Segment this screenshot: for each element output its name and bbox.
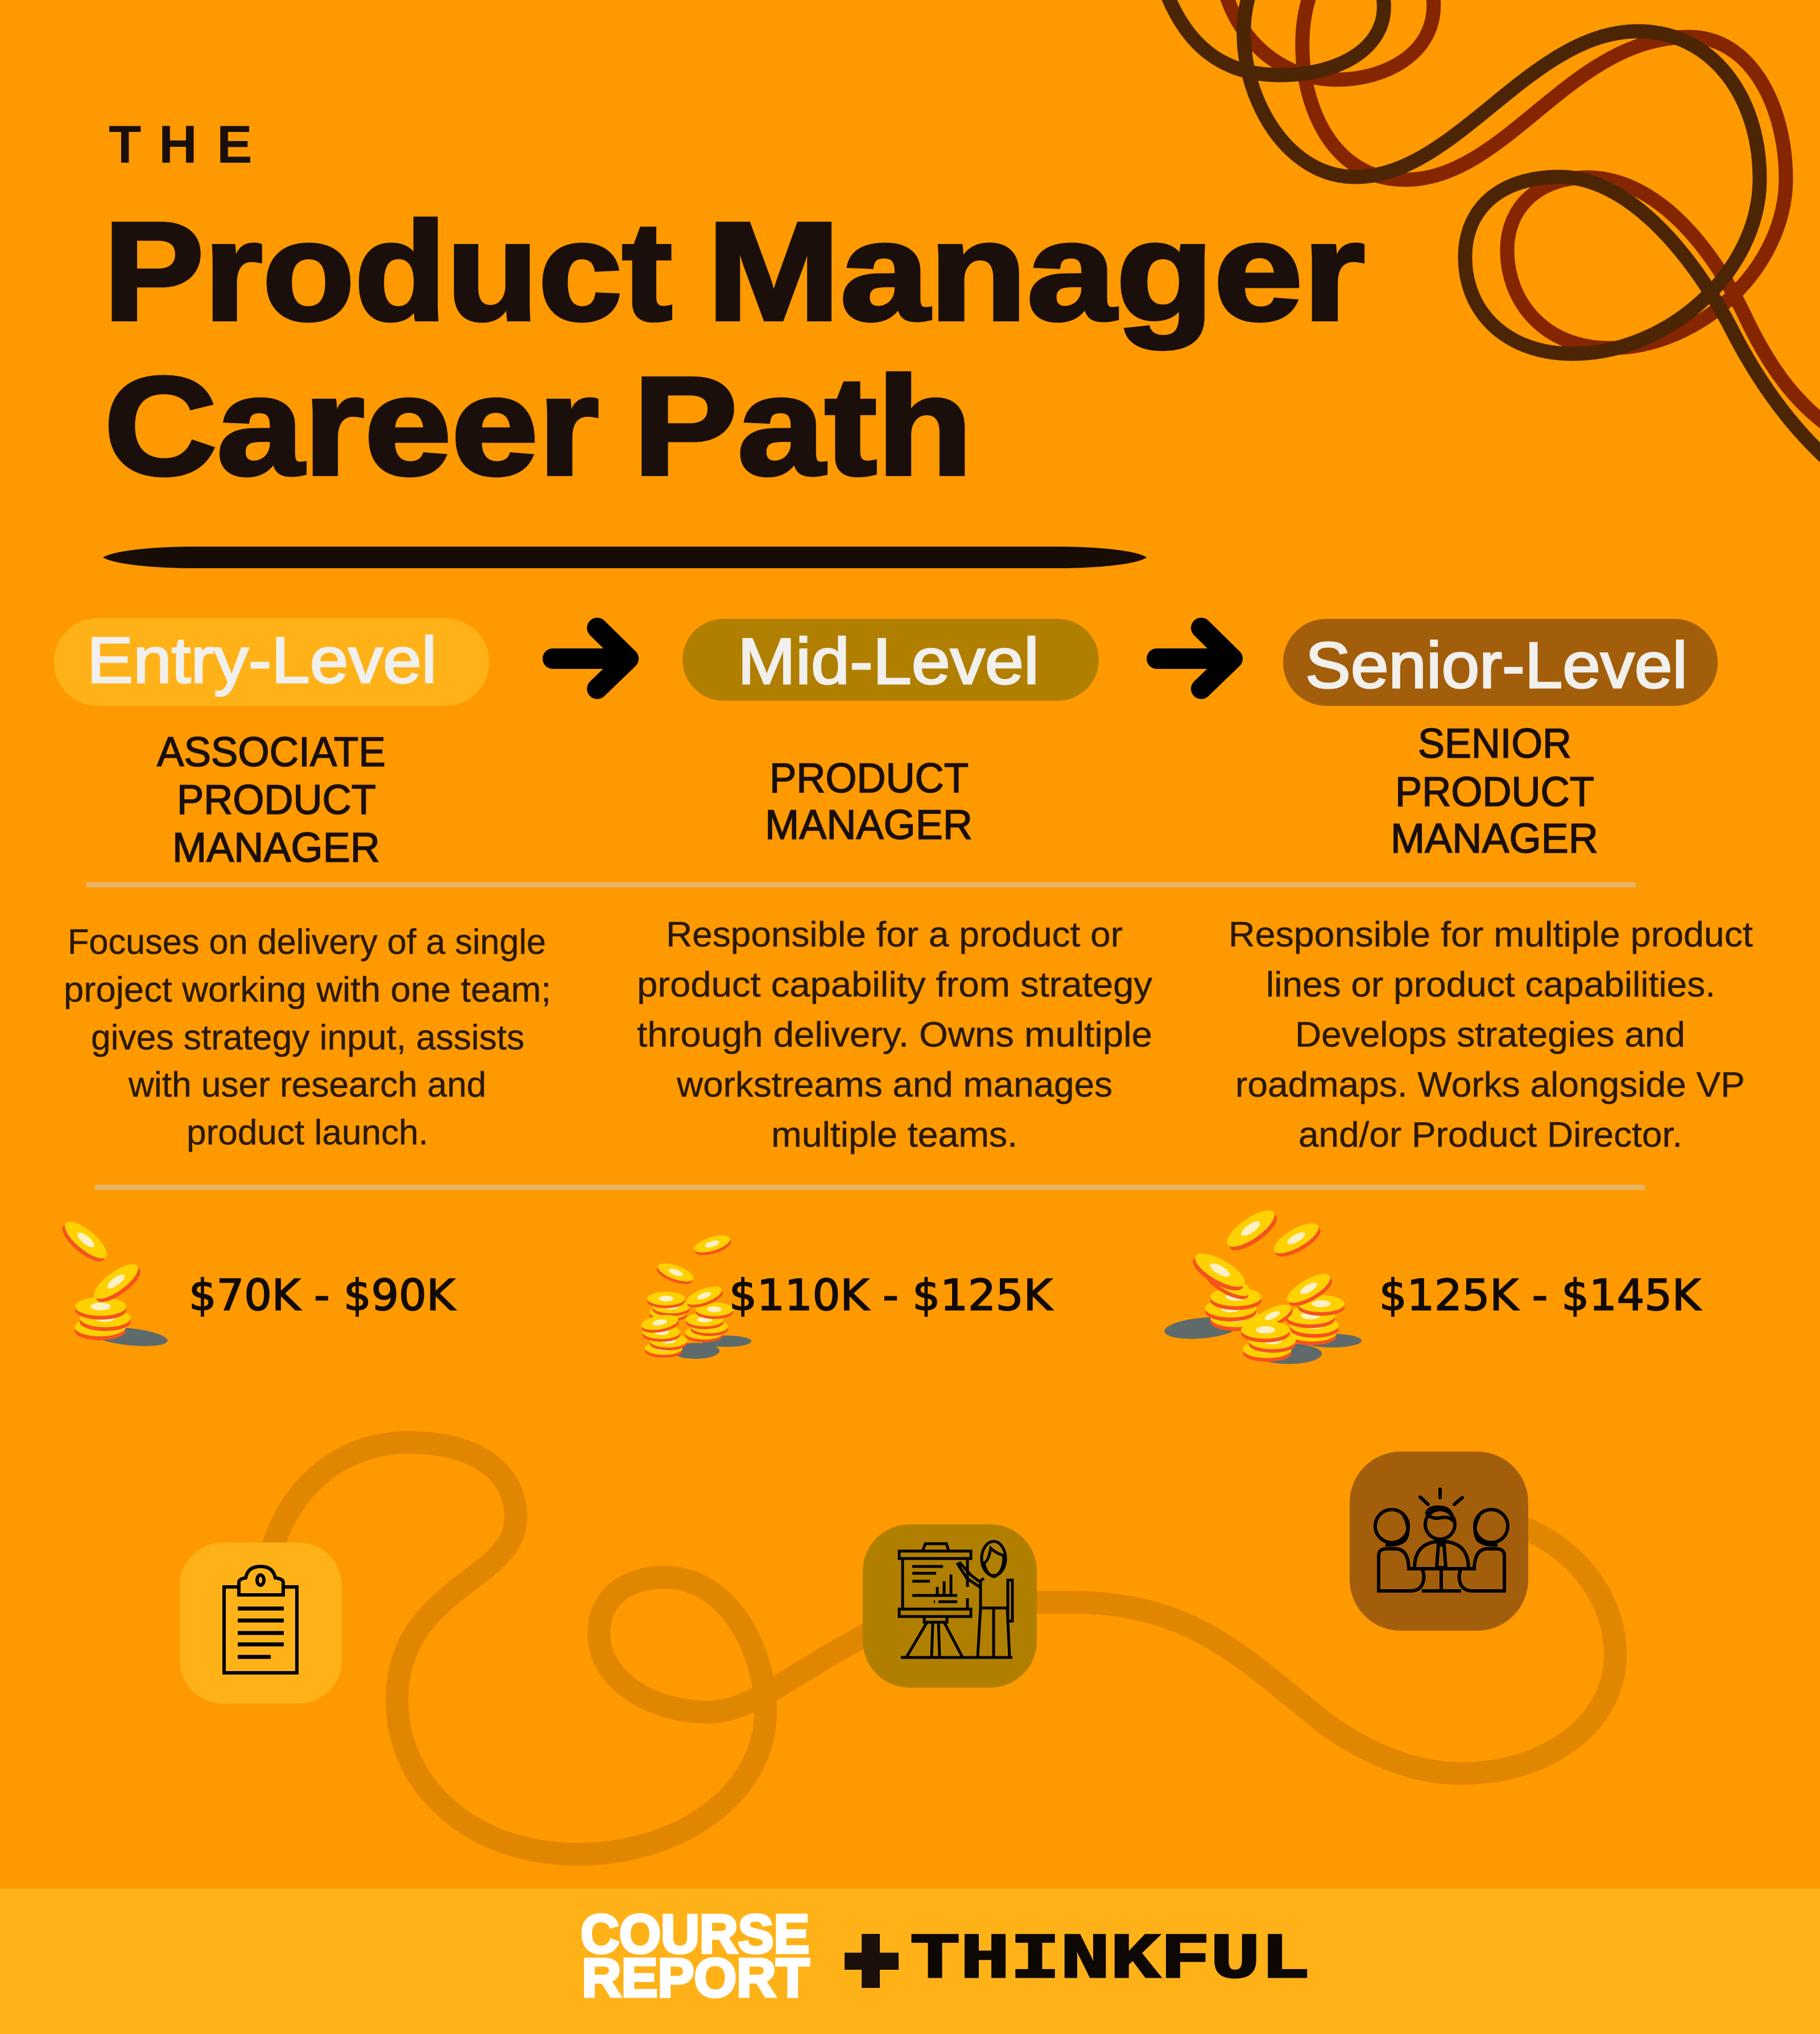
- role: senior product manager: SENIOR: [1418, 721, 1571, 767]
- icon: coins senior level: [1164, 1204, 1362, 1364]
- description: entry level: Focuses on delivery of a single: [68, 923, 546, 962]
- description: entry level: project working with one team;: [64, 970, 551, 1010]
- description: entry level: with user research and: [128, 1065, 486, 1105]
- badge: entry level: Entry-Level: [87, 625, 437, 697]
- role: product manager: [765, 755, 973, 848]
- role: senior product manager: PRODUCT: [1395, 769, 1594, 815]
- icon tile: clipboard: [180, 1543, 342, 1704]
- description: mid level: through delivery. Owns multiple: [637, 1015, 1152, 1055]
- role: associate product manager: ASSOCIATE: [157, 729, 386, 775]
- logo: course report: REPORT: [582, 1948, 809, 2008]
- salary: mid level: $110K - $125K: [729, 1270, 1053, 1320]
- plus sign: [845, 1934, 899, 1988]
- title: [104, 114, 1365, 505]
- description: senior level: [1228, 915, 1753, 1155]
- description: senior level: and/or Product Director.: [1298, 1115, 1682, 1155]
- role: associate product manager: MANAGER: [172, 825, 380, 871]
- title: THE: [109, 114, 253, 174]
- icon: coins mid level: [640, 1232, 751, 1359]
- badge: mid level: Mid-Level: [738, 626, 1039, 698]
- title: Product: [104, 193, 672, 350]
- description: entry level: product launch.: [187, 1113, 428, 1152]
- description: senior level: lines or product capabilities.: [1266, 965, 1715, 1004]
- decorative ropes top right: [1168, 0, 1820, 458]
- salary: entry level: $70K - $90K: [189, 1270, 456, 1320]
- description: mid level: [637, 915, 1152, 1155]
- salary: senior level: $125K - $145K: [1379, 1270, 1702, 1320]
- icon tile: presenter at easel: [863, 1524, 1037, 1688]
- logo: course report: COURSE: [581, 1904, 809, 1965]
- arrow: entry to mid: [553, 628, 628, 689]
- description: senior level: Develops strategies and: [1295, 1015, 1685, 1055]
- badge: senior level: Senior-Level: [1305, 630, 1687, 702]
- description: senior level: Responsible for multiple product: [1228, 915, 1753, 954]
- role: senior product manager: MANAGER: [1391, 816, 1598, 862]
- icon tile: team meeting: [1350, 1452, 1528, 1631]
- arrow: mid to senior: [1157, 628, 1232, 689]
- badge: mid level: [682, 619, 1099, 701]
- footer band: [0, 1888, 1820, 2034]
- title: Manager: [707, 193, 1365, 350]
- role: associate product manager: [157, 729, 386, 871]
- logo: course report: [581, 1904, 809, 2008]
- title: Path: [633, 348, 973, 505]
- description: mid level: Responsible for a product or: [666, 915, 1123, 954]
- logo: thinkful: THINKFUL: [910, 1924, 1310, 1996]
- description: mid level: multiple teams.: [771, 1115, 1017, 1155]
- description: entry level: [64, 923, 551, 1152]
- icon: coins entry level: [57, 1216, 168, 1349]
- badge: entry level: [54, 618, 489, 706]
- title: Career: [104, 348, 599, 505]
- role: product manager: PRODUCT: [770, 755, 969, 801]
- role: associate product manager: PRODUCT: [177, 777, 376, 823]
- description: mid level: workstreams and manages: [676, 1065, 1112, 1105]
- badge: senior level: [1283, 619, 1718, 706]
- description: senior level: roadmaps. Works alongside VP: [1235, 1065, 1745, 1105]
- role: senior product manager: [1391, 721, 1598, 862]
- role: product manager: MANAGER: [765, 802, 973, 848]
- description: entry level: gives strategy input, assists: [91, 1018, 524, 1057]
- title underline brush stroke: [103, 547, 1147, 568]
- career road path: [267, 1442, 1615, 1854]
- description: mid level: product capability from strategy: [637, 965, 1152, 1004]
